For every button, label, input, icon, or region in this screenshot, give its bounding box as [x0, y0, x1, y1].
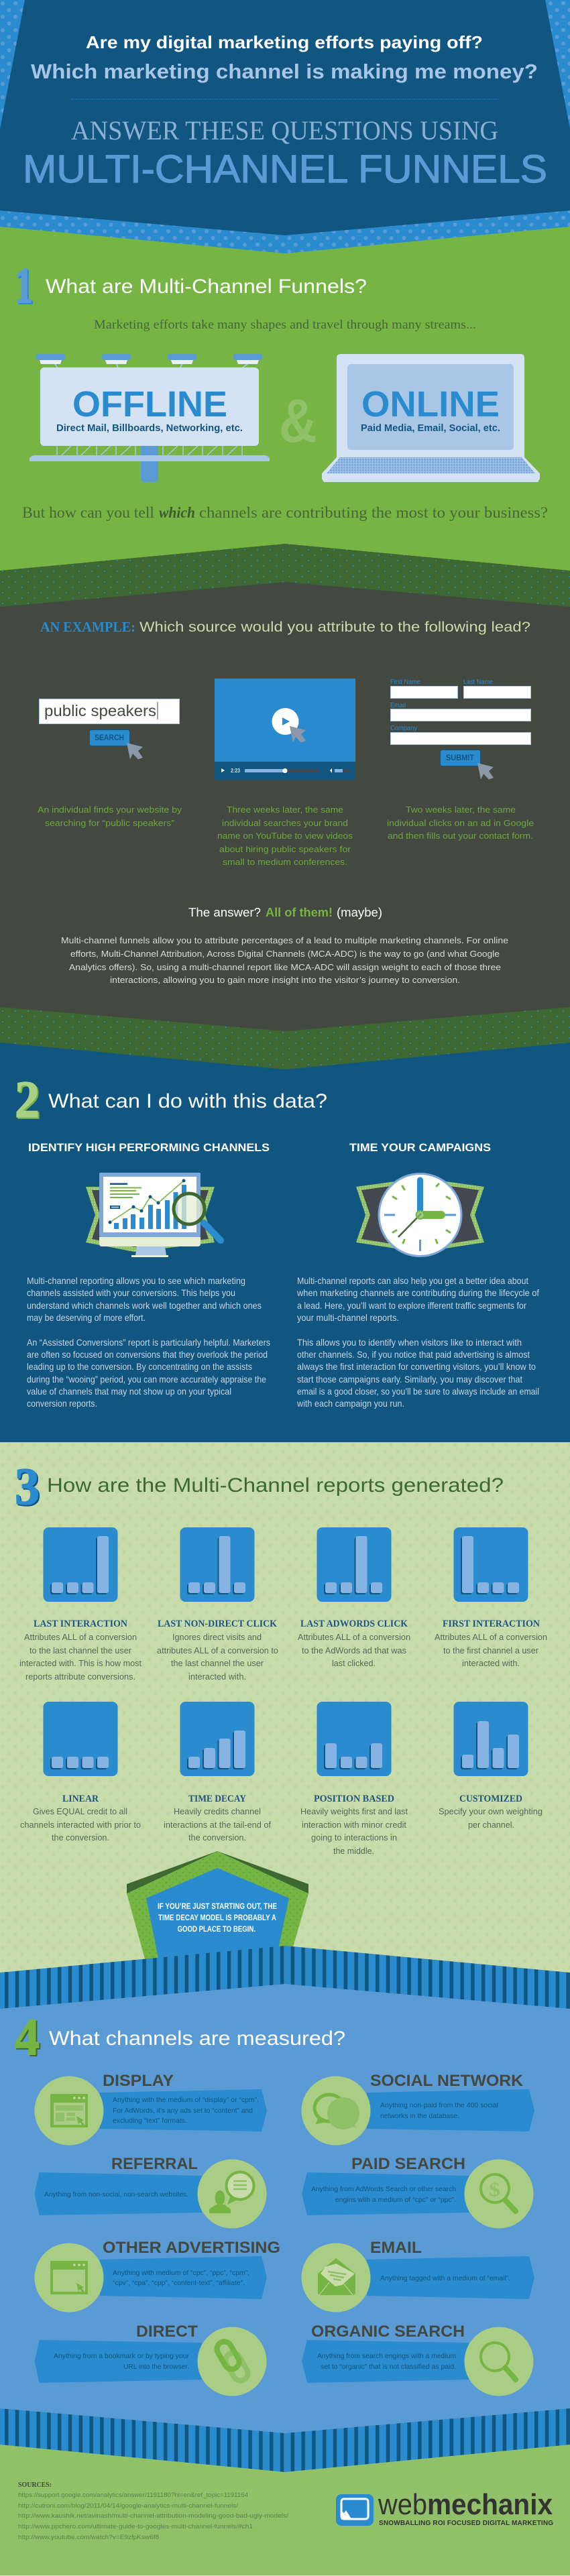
label: last interaction: reports attribute conversions. [25, 1672, 135, 1682]
description: Anything from a bookmark or by typing your [54, 2352, 189, 2360]
description: engins with a medium of “cpc” or “ppc”. [335, 2196, 456, 2204]
question sentence [22, 504, 548, 521]
report card: last non-direct click [180, 1527, 255, 1602]
offline examples: Direct Mail, Billboards, Networking, etc. [56, 423, 243, 434]
label: last non-direct click: interacted with. [188, 1672, 246, 1682]
channel: social network [302, 2072, 534, 2146]
answer paragraph: Analytics offers). So, using a multi-channel report like MCA-ADC will assign weight to each of those three [69, 962, 501, 972]
section 1 heading [15, 258, 367, 315]
description: Anything tagged with a medium of “email”. [380, 2274, 510, 2282]
description [311, 2185, 456, 2204]
icon: laptop [322, 354, 540, 482]
caption: video step: name on YouTube to view videos [217, 831, 353, 841]
icon: cursor [477, 763, 494, 779]
label: linear: the conversion. [52, 1833, 109, 1842]
panel: example charcoal background [0, 582, 570, 1031]
description: networks in the database. [380, 2112, 459, 2120]
heading text: How are the Multi-Channel reports generated? [47, 1474, 504, 1497]
label: last interaction [19, 1619, 142, 1682]
description: excluding “text” formats. [113, 2117, 187, 2125]
wordmark [378, 2488, 553, 2521]
label: last interaction: LAST INTERACTION [34, 1619, 127, 1629]
text block: identify channels: may be deserving of more effort. [27, 1312, 146, 1323]
label: last non-direct click: Ignores direct visits and [172, 1633, 262, 1642]
text block: identify channels: leading up to the conversion. By concentrating on the assists [27, 1361, 252, 1372]
answer paragraph: interactions, allowing you to gain more insight into the visitor’s journey to conversion. [110, 975, 460, 985]
numeral 3: 3 [16, 1458, 41, 1517]
numeral 1: 1 [15, 258, 33, 314]
text block: time campaigns [296, 1275, 539, 1409]
question one: Are my digital marketing efforts paying off? [86, 32, 483, 52]
label: customized: per channel. [468, 1820, 514, 1830]
callout: time decay tip [127, 1851, 308, 1961]
description [113, 2096, 259, 2125]
channel: direct [35, 2323, 267, 2396]
panel: navy header [0, 0, 570, 235]
search query: public speakers [44, 702, 156, 719]
numeral 3: 3 [15, 1457, 40, 1515]
description: For AdWords, it’s any ads set to “content” and [113, 2107, 253, 2115]
text block: identify channels: during the “wooing” period, you can more accurately appraise the [27, 1374, 266, 1385]
label: position based [300, 1794, 408, 1856]
label: position based: interaction with minor credit [302, 1820, 407, 1830]
sources: http://www.ppchero.com/ultimate-guide-to-googles-multi-channel-funnels/#ch1 [18, 2523, 253, 2530]
sources: SOURCES: [18, 2481, 52, 2489]
title: DIRECT [136, 2323, 198, 2341]
example heading: Which source would you attribute to the following lead? [139, 620, 530, 635]
text block: identify channels: channels assisted with your conversions. This helps you [27, 1287, 235, 1298]
text block: identify channels: An “Assisted Conversions” report is particularly helpful. Marketers [27, 1337, 270, 1348]
icon: speech bubbles [315, 2095, 359, 2129]
label: linear [20, 1794, 141, 1842]
sources: http://www.kaushik.net/avinash/multi-channel-attribution-modeling-good-bad-ugly-models/ [18, 2512, 288, 2520]
sources: http://cutroni.com/blog/2011/04/14/google-analytics-multi-channel-funnels/ [18, 2502, 238, 2510]
answer heading: All of them! [266, 906, 333, 919]
label: first interaction: to the first channel a user [443, 1646, 538, 1655]
description [317, 2352, 456, 2371]
contact form step: Company [390, 725, 417, 732]
dotted divider [71, 99, 499, 100]
offline label: OFFLINE [72, 384, 227, 424]
heading text: What are Multi-Channel Funnels? [46, 276, 367, 298]
label: last non-direct click: the last channel the user [171, 1659, 264, 1668]
label: last interaction: to the last channel the user [30, 1646, 131, 1655]
panel: section 4 blue background [0, 1978, 570, 2433]
text block: time campaigns: Multi-channel reports can also help you get a better idea about [297, 1275, 528, 1286]
bottom edge [0, 2575, 570, 2576]
description: URL into the browser. [123, 2363, 189, 2371]
label: first interaction: FIRST INTERACTION [443, 1619, 540, 1629]
icon: cursor [290, 726, 306, 743]
text block: identify channels [27, 1275, 270, 1409]
contact form step [390, 679, 531, 779]
text block: identify channels: understand which channels work well together and which ones [27, 1300, 262, 1311]
panel: section 2 navy background [0, 1006, 570, 1442]
report card: customized [453, 1702, 528, 1776]
contact form step: First Name [390, 679, 420, 686]
answer paragraph: Multi-channel funnels allow you to attribute percentages of a lead to multiple marketing channels. For online [61, 935, 508, 945]
label: first interaction: Attributes ALL of a conversion [435, 1633, 547, 1642]
submit button: SUBMIT [446, 753, 475, 762]
text block: identify channels: value of channels that may not show up on your typical [27, 1386, 231, 1397]
tagline: SNOWBALLING ROI FOCUSED DIGITAL MARKETING [379, 2520, 553, 2527]
sources [18, 2481, 288, 2541]
heading text: What can I do with this data? [48, 1090, 327, 1112]
panel: footer green background [0, 2407, 570, 2576]
caption: search step [38, 805, 182, 828]
online label: ONLINE [361, 384, 500, 424]
online examples: Paid Media, Email, Social, etc. [361, 423, 500, 434]
label: linear: channels interacted with prior to [20, 1820, 141, 1830]
icon: dollar magnifier [481, 2174, 516, 2211]
text block: time campaigns: your multi-channel reports. [297, 1312, 399, 1323]
description: Anything with the medium of “display” or “cpm”. [113, 2096, 259, 2104]
icon: ad window [50, 2261, 88, 2294]
label: time decay: interactions at the tail-end of [164, 1820, 272, 1830]
callout text: IF YOU’RE JUST STARTING OUT, THE [158, 1903, 277, 1911]
answer heading: (maybe) [337, 906, 382, 919]
callout text: TIME DECAY MODEL IS PROBABLY A [158, 1914, 276, 1922]
ampersand: & [279, 387, 317, 455]
channel: organic search [302, 2323, 534, 2396]
intro sentence: Marketing efforts take many shapes and travel through many streams... [94, 318, 476, 332]
label: first interaction: interacted with. [462, 1659, 520, 1668]
video time: 2:23 [231, 768, 240, 774]
label: customized [439, 1794, 543, 1830]
label: last interaction: interacted with. This is how most [19, 1659, 142, 1668]
channel: paid search [302, 2155, 534, 2229]
icon: billboard [30, 354, 270, 482]
panel: striped band top [0, 1946, 570, 2009]
text block: identify channels: are often so focused on conversions that they overlook the period [27, 1349, 268, 1360]
video player step [215, 679, 355, 780]
label: position based: the middle. [333, 1847, 374, 1856]
section 2 heading [15, 1070, 327, 1130]
title: ORGANIC SEARCH [311, 2323, 465, 2341]
icon: magnifier [481, 2343, 516, 2380]
label: time decay [164, 1794, 272, 1842]
numeral 2: 2 [16, 1071, 41, 1130]
report card: linear [43, 1702, 118, 1776]
panel: section 1 green background [0, 201, 570, 670]
caption: form step: and then fills out your contact form. [388, 831, 533, 841]
contact form step: Email [390, 702, 406, 709]
icon: analytics monitor [86, 1173, 221, 1257]
caption: form step [387, 805, 534, 841]
search button: SEARCH [95, 733, 124, 742]
caption: search step: searching for “public speakers” [45, 818, 174, 828]
panel: section 3 pale green background [0, 1442, 570, 2019]
panel: striped band bottom [0, 2408, 570, 2472]
label: last adwords click: Attributes ALL of a conversion [298, 1633, 410, 1642]
search button [90, 729, 130, 746]
label: time decay: Heavily credits channel [174, 1807, 261, 1816]
label: last adwords click [298, 1619, 410, 1668]
icon: clock [356, 1173, 484, 1256]
example heading: AN EXAMPLE: [40, 619, 135, 635]
text block: identify channels: conversion reports. [27, 1398, 97, 1409]
icon: chain link [214, 2339, 251, 2384]
logo icon [336, 2494, 374, 2526]
wordmark: mechanix [427, 2488, 553, 2521]
example heading [40, 619, 530, 635]
label: last adwords click: LAST ADWORDS CLICK [300, 1619, 408, 1629]
label: time decay: TIME DECAY [188, 1794, 246, 1804]
caption: video step: individual searches your brand [222, 818, 348, 828]
label: last interaction: Attributes ALL of a conversion [24, 1633, 137, 1642]
submit button [440, 750, 480, 766]
label: position based: Heavily weights first and last [300, 1807, 408, 1816]
label: position based: going to interactions in [311, 1833, 397, 1842]
caption: form step: Two weeks later, the same [406, 805, 516, 815]
description: “cpv”, “cpa”, “cpp”, “content-text”, “affiliate”. [113, 2279, 245, 2287]
question sentence: But how can you tell [22, 504, 154, 521]
answer paragraph: efforts, Multi-Channel Attribution, Across Digital Channels (MCA-ADC) is the way to go (and what Google [70, 949, 500, 959]
subheading: time: TIME YOUR CAMPAIGNS [349, 1141, 491, 1154]
question sentence: channels are contributing the most to your business? [199, 504, 548, 521]
label: last adwords click: last clicked. [332, 1659, 376, 1668]
answer heading [188, 906, 382, 919]
label: linear: LINEAR [62, 1794, 99, 1804]
sources: http://www.youtube.com/watch?v=E9zfpKsw6f8 [18, 2534, 159, 2541]
icon: person with speech bubble [209, 2172, 253, 2213]
title: PAID SEARCH [351, 2155, 465, 2173]
main title: MULTI-CHANNEL FUNNELS [23, 148, 547, 191]
text block: time campaigns: other channels. So, if you notice that paid advertising is almost [297, 1349, 530, 1360]
description [113, 2269, 249, 2287]
title: REFERRAL [111, 2155, 198, 2173]
text block: time campaigns: email is a good closer, so you’ll be sure to always include an email [297, 1386, 539, 1397]
caption: search step: An individual finds your website by [38, 805, 182, 815]
description: Anything from AdWords Search or other search [311, 2185, 456, 2193]
label: customized: Specify your own weighting [439, 1807, 543, 1816]
description: Anything from non-social, non-search websites. [44, 2190, 188, 2199]
bar chart [114, 1185, 186, 1229]
numeral 4: 4 [15, 2007, 40, 2066]
description: Anything with medium of “cpc”, “ppc”, “cpm”, [113, 2269, 249, 2277]
caption: video step [217, 805, 353, 867]
heading text: What channels are measured? [49, 2028, 345, 2050]
numeral 1: 1 [16, 259, 34, 315]
callout text [158, 1903, 277, 1934]
contact form step: Last Name [463, 679, 493, 686]
text block: identify channels: Multi-channel reporting allows you to see which marketing [27, 1275, 245, 1286]
numeral 2: 2 [15, 1070, 40, 1128]
icon: dollar magnifier: $ [489, 2179, 500, 2201]
question sentence: which [159, 504, 195, 521]
text block: time campaigns: a lead. Here, you’ll want to explore ifferent traffic segments for [297, 1300, 526, 1311]
label: linear: Gives EQUAL credit to all [33, 1807, 127, 1816]
caption: video step: small to medium conferences. [223, 857, 347, 867]
title: SOCIAL NETWORK [370, 2072, 524, 2090]
report card: time decay [180, 1702, 255, 1776]
logo: webmechanix [336, 2488, 553, 2527]
section 3 heading [15, 1457, 504, 1517]
subheading: identify: IDENTIFY HIGH PERFORMING CHANNELS [28, 1141, 270, 1154]
panel: dotted blue header band [0, 0, 570, 253]
label: last non-direct click [157, 1619, 278, 1682]
label: customized: CUSTOMIZED [459, 1794, 522, 1804]
numeral 4: 4 [16, 2009, 41, 2067]
description [380, 2101, 498, 2120]
title: EMAIL [370, 2239, 422, 2257]
answer line: ANSWER THESE QUESTIONS USING [71, 115, 498, 145]
header title block [23, 32, 547, 191]
text block: time campaigns: always the first interaction for converting visitors, you’ll know to [297, 1361, 536, 1372]
panel: dotted dark green band [0, 544, 570, 1069]
label: time decay: the conversion. [188, 1833, 246, 1842]
description: Anything from search engings with a medium [317, 2352, 456, 2360]
question two: Which marketing channel is making me money? [31, 60, 538, 83]
description: set to “organic” that is not classified as paid. [321, 2363, 456, 2371]
answer heading: The answer? [188, 906, 261, 919]
description: Anything non-paid from the 400 social [380, 2101, 498, 2109]
channel: email [302, 2239, 534, 2312]
wordmark: web [378, 2488, 427, 2521]
title: DISPLAY [103, 2072, 174, 2090]
label: first interaction [435, 1619, 547, 1668]
line chart [109, 1179, 185, 1224]
label: position based: POSITION BASED [314, 1794, 394, 1804]
label: last non-direct click: LAST NON-DIRECT CLICK [158, 1619, 277, 1629]
report card: last adwords click [317, 1527, 392, 1602]
report card: position based [317, 1702, 392, 1776]
callout text: GOOD PLACE TO BEGIN. [177, 1926, 255, 1934]
icon: cursor [127, 743, 143, 759]
report card: last interaction [43, 1527, 118, 1602]
description [54, 2352, 189, 2371]
channel: display [35, 2072, 267, 2146]
report card: first interaction [453, 1527, 528, 1602]
title: OTHER ADVERTISING [103, 2239, 280, 2257]
caption: form step: individual clicks on an ad in Google [387, 818, 534, 828]
channel: referral [35, 2155, 267, 2229]
label: last adwords click: to the AdWords ad that was [302, 1646, 406, 1655]
text block: time campaigns: when marketing channels are contributing during the lifecycle of [296, 1287, 539, 1298]
caption: video step: about hiring public speakers for [219, 844, 351, 854]
text block: time campaigns: start those campaigns early. Similarly, you may discover that [297, 1374, 522, 1385]
text block: time campaigns: This allows you to identify when visitors like to interact with [297, 1337, 522, 1348]
answer paragraph [61, 935, 508, 985]
caption: video step: Three weeks later, the same [227, 805, 343, 815]
section 4 heading [15, 2007, 345, 2067]
channel: other advertising [35, 2239, 280, 2312]
text block: time campaigns: with each campaign you run. [296, 1398, 404, 1409]
icon: display window [50, 2094, 88, 2127]
icon: envelope [318, 2258, 355, 2295]
search box step [39, 699, 180, 759]
label: last non-direct click: attributes ALL of a conversion to [157, 1646, 278, 1655]
sources: https://support.google.com/analytics/answer/1191180?hl=en&ref_topic=1191164 [18, 2492, 248, 2499]
icon: magnifier [174, 1193, 221, 1240]
